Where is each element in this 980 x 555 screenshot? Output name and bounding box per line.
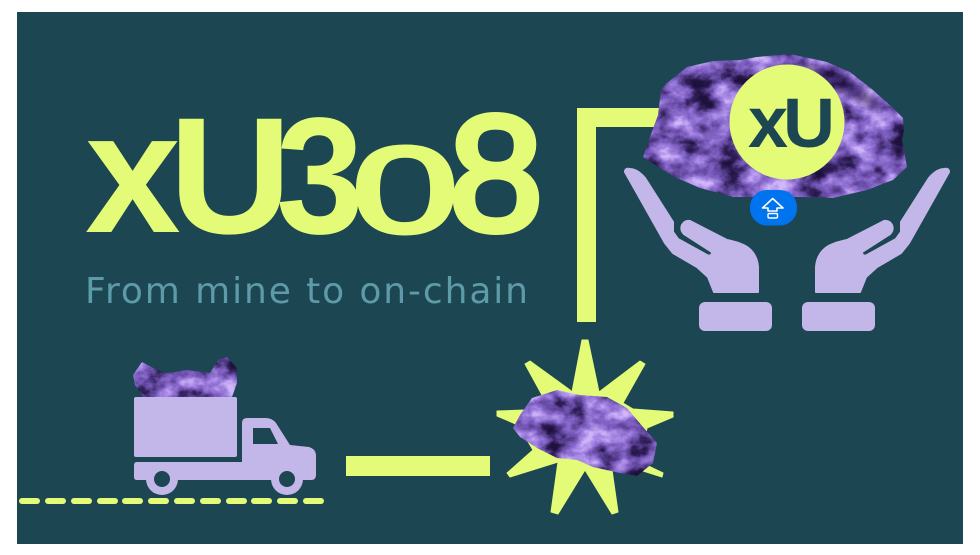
large rock xyxy=(643,54,907,198)
starburst xyxy=(497,340,673,514)
right hand xyxy=(802,169,949,331)
connector bar: truck to processing xyxy=(346,456,490,476)
logo: xU308 wordmark: 0 xyxy=(352,122,458,258)
logo: xU308 wordmark: x xyxy=(85,77,181,269)
logo: xU308 wordmark: U xyxy=(169,83,292,269)
logo: xU308 wordmark: 3 xyxy=(276,83,364,269)
token badge: xU: U xyxy=(783,85,835,163)
token badge: xU: x xyxy=(748,83,788,163)
logo: xU308 wordmark xyxy=(85,77,543,269)
icon: open hands xyxy=(625,169,949,331)
icon: delivery truck xyxy=(134,397,316,495)
processing rock xyxy=(513,390,657,476)
truck rock load xyxy=(133,357,237,397)
dashed road xyxy=(19,498,324,504)
token badge: xU xyxy=(730,64,844,180)
floating blue upload button xyxy=(750,190,797,226)
tagline: From mine to on-chain xyxy=(85,271,528,312)
left hand xyxy=(625,169,772,331)
connector: vertical and top line from logo to hands xyxy=(577,108,665,322)
logo: xU308 wordmark: 8 xyxy=(449,82,543,265)
dark streak on rock xyxy=(800,62,880,112)
